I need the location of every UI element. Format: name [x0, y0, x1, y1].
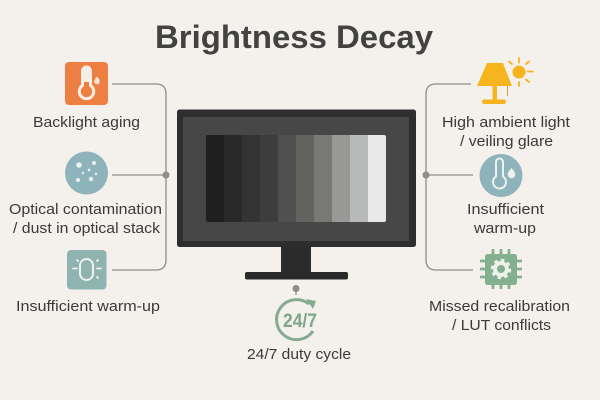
bottom connector: [292, 285, 300, 295]
label: high ambient light: / veiling glare: [460, 133, 553, 150]
icon: chip with gear: [480, 249, 522, 289]
monitor bezel: [183, 117, 409, 241]
label: optical contamination: / dust in optical stack: [13, 220, 161, 237]
label: 24/7 duty cycle: 24/7 duty cycle: [247, 346, 351, 363]
right connector lines: [422, 84, 473, 270]
icon: dust particles: [65, 152, 108, 194]
label: high ambient light: High ambient light: [442, 114, 571, 131]
label: missed recalibration: / LUT conflicts: [452, 317, 551, 334]
label: insufficient warm-up right: Insufficient: [467, 201, 545, 218]
icon: 24/7 cycle: [277, 299, 317, 340]
label: insufficient warm-up right: [467, 201, 545, 237]
label: missed recalibration: Missed recalibration: [429, 298, 570, 315]
label: backlight aging: Backlight aging: [33, 114, 140, 131]
monitor stand: [245, 246, 348, 280]
left connector lines: [112, 84, 170, 270]
icon: warm-up bulb square: [67, 250, 106, 290]
label: missed recalibration: [429, 298, 570, 334]
label: optical contamination: Optical contamination: [9, 201, 162, 218]
title: Brightness Decay: [155, 19, 433, 55]
icon: thermometer circle: [480, 154, 522, 197]
label: insufficient warm-up left: Insufficient warm-up: [16, 298, 160, 315]
monitor frame: [177, 110, 416, 247]
icon: 24/7 cycle: 24/7: [283, 311, 317, 332]
label: high ambient light: [442, 114, 571, 150]
grayscale bars: [206, 135, 386, 222]
icon: lamp and sun: [477, 58, 533, 104]
label: insufficient warm-up right: warm-up: [473, 220, 536, 237]
monitor: [177, 110, 416, 280]
icon: thermometer on orange square: [65, 62, 108, 105]
label: optical contamination: [9, 201, 162, 237]
